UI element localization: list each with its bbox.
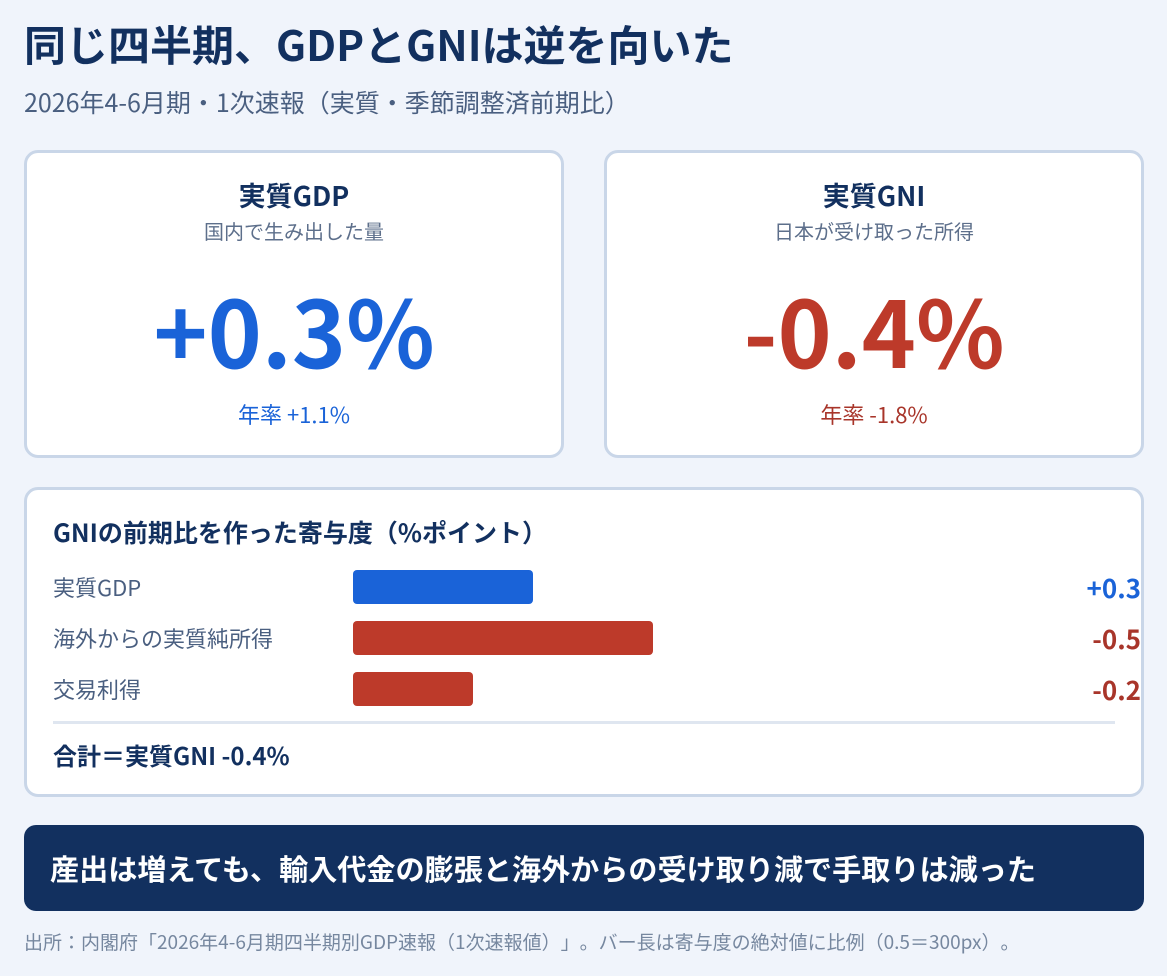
total: 合計＝実質GNI -0.4% bbox=[53, 737, 290, 772]
source note: 出所：内閣府「2026年4-6月期四半期別GDP速報（1次速報値）」。バー長は寄与度の絶対値に比例（0.5＝300px）。 bbox=[24, 928, 1020, 955]
value: -0.2: -0.2 bbox=[1092, 671, 1141, 708]
heading: real GNI: 実質GNI bbox=[823, 175, 925, 214]
heading: real GDP: 実質GDP bbox=[239, 175, 349, 214]
row label: net income from abroad: 海外からの実質純所得 bbox=[53, 622, 273, 654]
title: 同じ四半期、GDPとGNIは逆を向いた bbox=[24, 13, 734, 74]
panel: real GNI bbox=[604, 150, 1144, 458]
chart heading: GNIの前期比を作った寄与度（%ポイント） bbox=[53, 514, 547, 550]
row label: real GDP: 実質GDP bbox=[53, 571, 141, 603]
panel: real GDP bbox=[24, 150, 564, 458]
value: -0.5: -0.5 bbox=[1092, 620, 1141, 657]
description: GDP: 国内で生み出した量 bbox=[204, 216, 384, 245]
callout text: 産出は増えても、輸入代金の膨張と海外からの受け取り減で手取りは減った bbox=[50, 847, 1036, 889]
value: GDP +0.3%: +0.3% bbox=[153, 262, 435, 395]
callout bbox=[24, 825, 1144, 911]
annualized: GDP: 年率 +1.1% bbox=[238, 398, 350, 430]
value: GNI -0.4%: -0.4% bbox=[743, 262, 1005, 395]
annualized: GNI: 年率 -1.8% bbox=[820, 398, 928, 430]
value: +0.3: +0.3 bbox=[1087, 569, 1141, 606]
bar: terms of trade bbox=[353, 672, 473, 706]
panel: contribution chart bbox=[24, 487, 1144, 797]
bar: net income from abroad bbox=[353, 621, 653, 655]
description: GNI: 日本が受け取った所得 bbox=[774, 216, 974, 245]
bar: real GDP bbox=[353, 570, 533, 604]
row label: terms of trade: 交易利得 bbox=[53, 673, 141, 705]
subtitle: 2026年4-6月期・1次速報（実質・季節調整済前期比） bbox=[24, 84, 630, 120]
